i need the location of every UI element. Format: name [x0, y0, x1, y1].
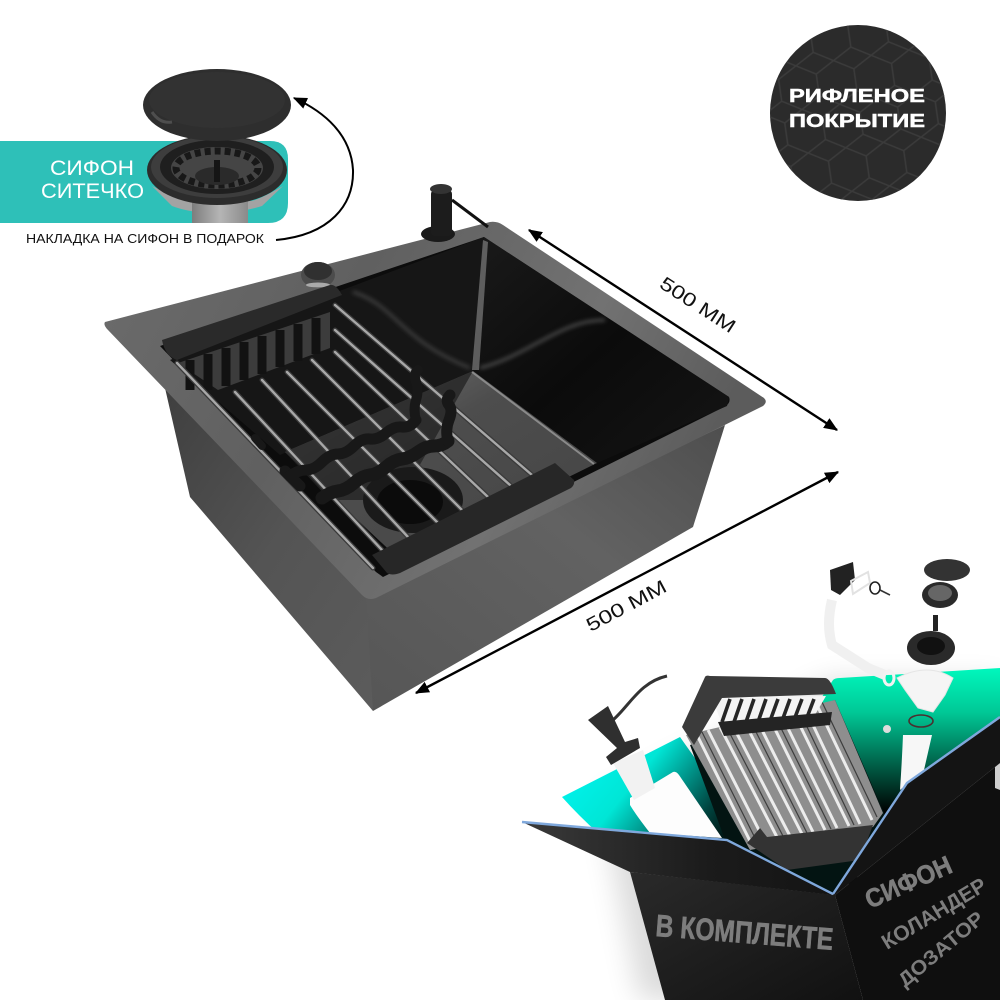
- box right face: [835, 763, 1000, 1000]
- pop-up button: [301, 262, 335, 288]
- box shadow: [600, 680, 1000, 1000]
- sink flange: [104, 222, 766, 599]
- reflections: [472, 240, 488, 370]
- box left flap: [522, 822, 833, 895]
- text: top dimension: 500 ММ: [655, 273, 739, 338]
- colander top handle: [682, 676, 836, 745]
- box front face: [630, 872, 863, 1000]
- box with contents: [522, 559, 1000, 1000]
- soap dispenser: [421, 184, 488, 242]
- box inner panels: [562, 668, 1000, 895]
- front handle: [372, 463, 574, 574]
- colander front handle: [747, 825, 873, 870]
- badge: ribbed coating: [770, 25, 946, 201]
- badge text: ПОКРЫТИЕ: [789, 110, 925, 131]
- colander window: [712, 696, 826, 724]
- text: caption: НАКЛАДКА НА СИФОН В ПОДАРОК: [26, 232, 265, 246]
- drain: [363, 467, 463, 533]
- box side text: ДОЗАТОР: [894, 907, 989, 992]
- badge text: РИФЛЕНОЕ: [789, 85, 925, 106]
- box text: в комплекте: В КОМПЛЕКТЕ: [654, 908, 835, 957]
- colander rods: [177, 305, 532, 568]
- bowl floor: [285, 371, 597, 560]
- siphon parts: [829, 559, 970, 790]
- label: сифон ситечко: [41, 157, 144, 203]
- box right flap: [833, 717, 1000, 895]
- sink right side: [366, 425, 725, 711]
- label: сифон ситечко: СИТЕЧКО: [41, 180, 144, 203]
- bowl right wall: [473, 237, 729, 463]
- teal label panel: [0, 141, 288, 223]
- dispenser in box: [588, 676, 722, 838]
- box side text: [860, 850, 991, 992]
- colander: [162, 285, 574, 574]
- label: сифон ситечко: СИФОН: [50, 157, 134, 180]
- text: bottom dimension: 500 ММ: [583, 577, 671, 637]
- icon: strainer with cap: [143, 69, 291, 223]
- bowl opening: [160, 237, 730, 577]
- box side text: СИФОН: [860, 850, 956, 914]
- back handle: [162, 285, 342, 360]
- badge text: [789, 85, 925, 131]
- sink left side: [165, 388, 378, 711]
- colander in box: [682, 676, 883, 870]
- arrow: bottom dimension: [416, 472, 838, 693]
- bowl back wall: [170, 237, 484, 455]
- sink: [104, 184, 766, 711]
- wavy bands: [255, 370, 451, 498]
- arrow: top dimension: [529, 230, 837, 430]
- box side text: КОЛАНДЕР: [878, 874, 991, 954]
- colander slatted end: [178, 312, 330, 390]
- arrow: curved to cap: [276, 98, 353, 240]
